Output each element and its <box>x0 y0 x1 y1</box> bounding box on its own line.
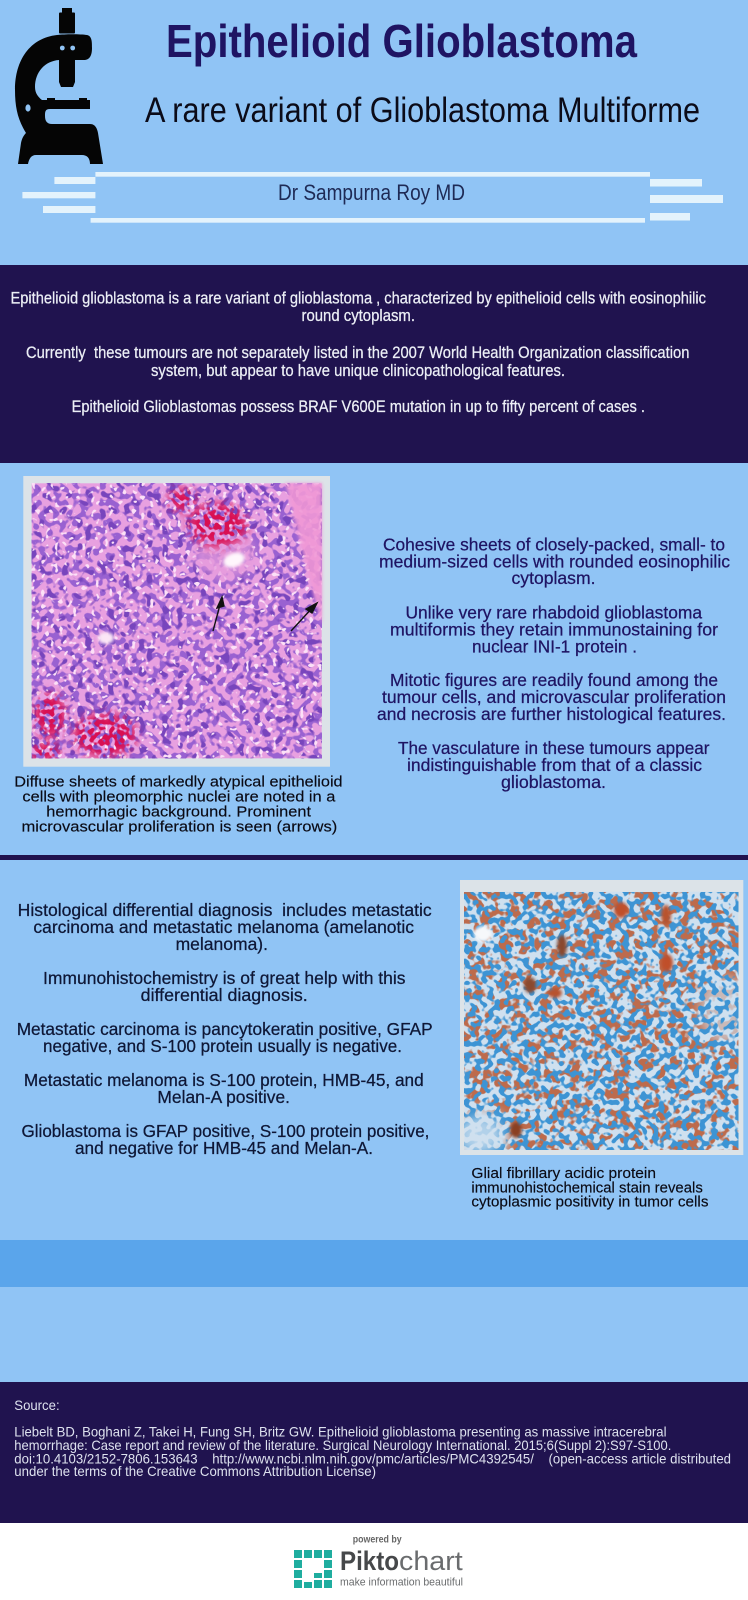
panel: histology <box>0 463 748 855</box>
caption: H and E stain: cells with pleomorphic nuclei are noted in a <box>22 789 336 806</box>
text: differential diagnosis: Metastatic carcinoma is pancytokeratin positive, GFAP <box>17 1019 433 1039</box>
intro text: system, but appear to have unique clinicopathological features. <box>151 362 565 380</box>
text: differential diagnosis: melanoma). <box>176 934 268 954</box>
text: differential diagnosis: Histological differential diagnosis includes metastatic <box>18 900 432 920</box>
text: histological features: medium-sized cells with rounded eosinophilic <box>379 551 730 571</box>
author name: Dr Sampurna Roy MD <box>278 180 465 205</box>
text: histological features: tumour cells, and microvascular proliferation <box>382 687 726 707</box>
text: differential diagnosis: negative, and S-100 protein usually is negative. <box>43 1036 402 1056</box>
title: Epithelioid Glioblastoma <box>166 15 637 67</box>
text: histological features <box>377 535 730 792</box>
text: differential diagnosis: carcinoma and metastatic melanoma (amelanotic <box>33 917 414 937</box>
text: differential diagnosis <box>17 900 433 1158</box>
icon: Piktochart logo <box>294 1550 332 1588</box>
caption: H and E stain: hemorrhagic background. Prominent <box>46 804 312 821</box>
wordmark: Pikto: Pikto <box>340 1546 399 1576</box>
panel: footer <box>0 1523 748 1600</box>
text: differential diagnosis: and negative for HMB-45 and Melan-A. <box>75 1138 373 1158</box>
text: histological features: Cohesive sheets of closely-packed, small- to <box>383 535 725 555</box>
caption: GFAP stain <box>471 1165 708 1211</box>
text: histological features: nuclear INI-1 protein . <box>472 636 637 656</box>
intro text: round cytoplasm. <box>302 307 415 325</box>
panel: source <box>0 1382 748 1523</box>
panel: header <box>0 0 748 265</box>
author ribbon <box>22 172 723 223</box>
caption: GFAP stain: Glial fibrillary acidic protein <box>471 1165 656 1182</box>
caption: GFAP stain: immunohistochemical stain reveals <box>471 1180 703 1197</box>
text: histological features: cytoplasm. <box>512 568 596 588</box>
text: differential diagnosis: Immunohistochemistry is of great help with this <box>43 968 406 988</box>
icon: microscope <box>15 8 103 164</box>
text: histological features: multiformis they retain immunostaining for <box>390 619 718 639</box>
wordmark: chart: chart <box>399 1546 463 1576</box>
text: histological features: The vasculature in these tumours appear <box>398 738 710 758</box>
text: differential diagnosis: Metastatic melanoma is S-100 protein, HMB-45, and <box>24 1070 424 1090</box>
source citation: Liebelt BD, Boghani Z, Takei H, Fung SH, Britz GW. Epithelioid glioblastoma presenting as massive intracerebral <box>14 1424 667 1440</box>
intro text <box>10 290 706 416</box>
text: histological features: Mitotic figures are readily found among the <box>390 670 718 690</box>
caption: H and E stain: microvascular proliferation is seen (arrows) <box>22 819 337 836</box>
tagline: make information beautiful <box>340 1577 463 1589</box>
source citation: under the terms of the Creative Commons Attribution License) <box>14 1463 376 1479</box>
caption: H and E stain: Diffuse sheets of markedly atypical epithelioid <box>14 774 343 791</box>
divider band <box>0 855 748 860</box>
panel: introduction <box>0 265 748 463</box>
intro text: Currently these tumours are not separately listed in the 2007 World Health Organization classification <box>26 344 689 362</box>
text: histological features: glioblastoma. <box>501 772 606 792</box>
text: histological features: Unlike very rare rhabdoid glioblastoma <box>406 602 702 622</box>
text: histological features: and necrosis are further histological features. <box>377 704 726 724</box>
text: differential diagnosis: Melan-A positive. <box>157 1087 290 1107</box>
caption: GFAP stain: cytoplasmic positivity in tumor cells <box>471 1194 708 1211</box>
powered by label: powered by <box>353 1534 402 1546</box>
source citation: hemorrhage: Case report and review of the literature. Surgical Neurology International. 2015;6(Suppl 2):S97-S100. <box>14 1437 671 1453</box>
intro text: Epithelioid Glioblastomas possess BRAF V600E mutation in up to fifty percent of cases . <box>72 398 645 416</box>
empty blue band <box>0 1240 748 1287</box>
source heading: Source: <box>14 1397 60 1413</box>
text: differential diagnosis: differential diagnosis. <box>141 985 308 1005</box>
text: histological features: indistinguishable from that of a classic <box>407 755 702 775</box>
micrograph: H and E stain <box>23 476 330 767</box>
source citation <box>14 1424 731 1479</box>
text: differential diagnosis: Glioblastoma is GFAP positive, S-100 protein positive, <box>22 1121 429 1141</box>
micrograph: GFAP stain <box>460 880 743 1155</box>
caption: H and E stain <box>14 774 343 836</box>
empty light panel <box>0 1287 748 1382</box>
panel: differential diagnosis <box>0 860 748 1240</box>
